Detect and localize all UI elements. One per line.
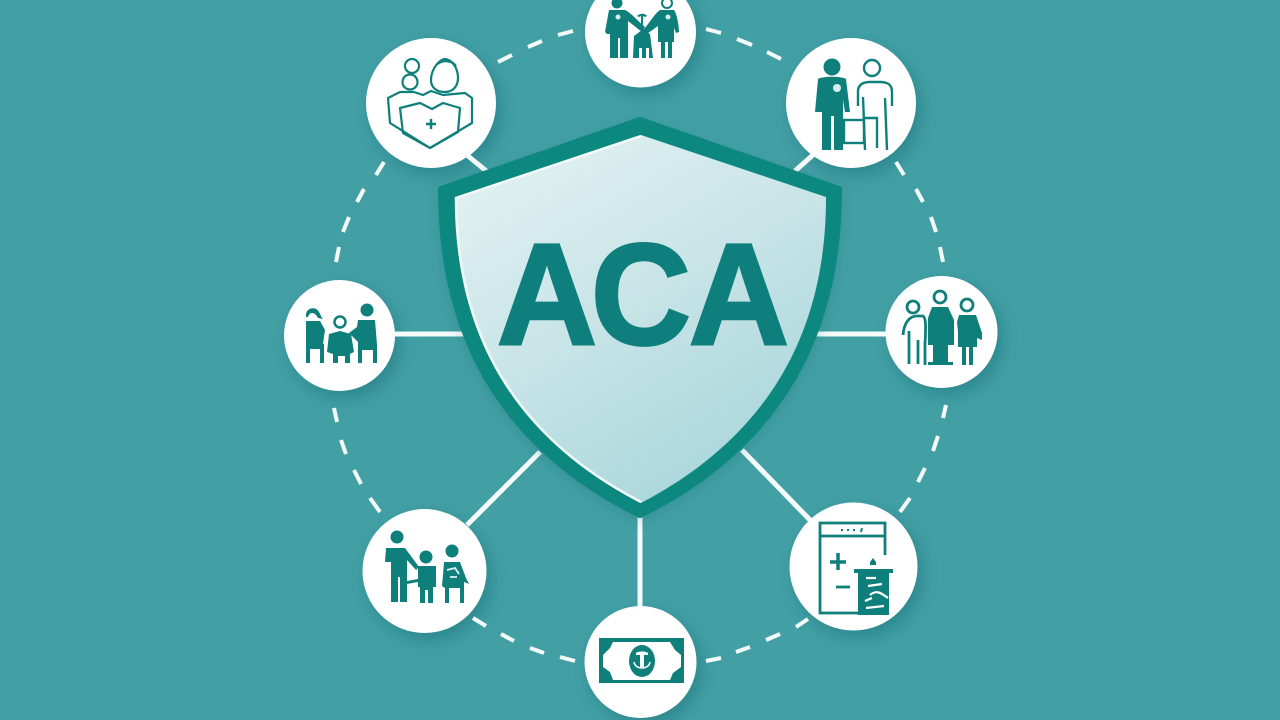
shield face [455, 135, 826, 503]
icon node: right, three standing adults [886, 276, 998, 388]
dashed orbit ring [334, 29, 946, 661]
icon node: top-left, family and heart [366, 38, 496, 168]
icon node: bottom-right, medical form and jar [790, 502, 918, 630]
title: ACA: A [689, 213, 789, 375]
central shield badge [441, 120, 839, 515]
icon node: bottom-left, parent with children [362, 509, 486, 633]
title: ACA: A [497, 213, 597, 375]
shield highlight [456, 136, 641, 502]
icon node: top-right, patient and caregiver [786, 38, 916, 168]
spoke connectors [394, 154, 888, 607]
shield outer border [441, 120, 839, 515]
icon node: bottom, banknote [584, 606, 696, 718]
title: ACA [497, 213, 789, 375]
icon node: left, seated family [284, 280, 395, 391]
title: ACA: C [591, 213, 691, 375]
icon node: top, elderly couple with cane [585, 0, 696, 88]
